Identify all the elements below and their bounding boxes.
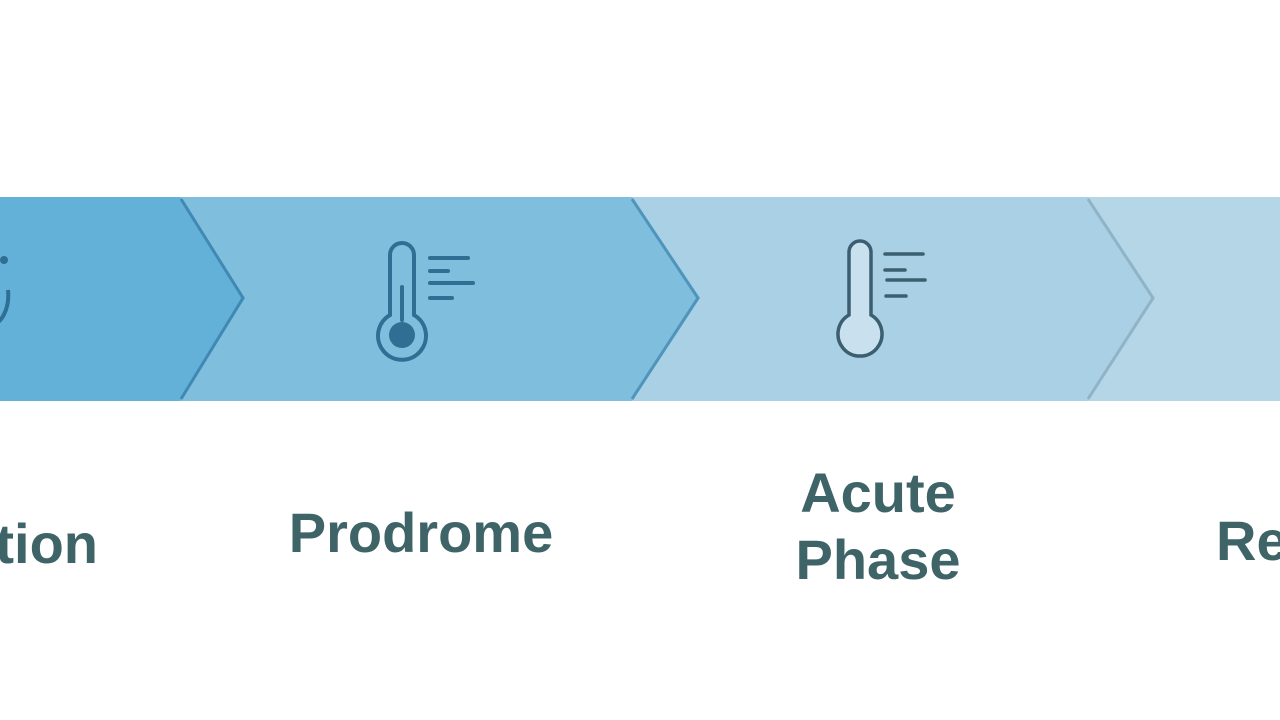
icon: partial circular arrow [0,256,8,325]
icon: thermometer high [378,243,473,360]
chevron edge 3 [1088,199,1153,399]
label: Acute Phase: Phase [796,528,960,591]
segment 2 [0,197,700,401]
chevron edge 1 [181,199,243,399]
segment 3 [0,197,1155,401]
label: Prodrome: Prodrome [289,501,553,564]
segment 4 [0,197,1280,401]
chevron edge 2 [632,199,698,399]
panel: stage band [0,197,1280,401]
label: Acute Phase: Acute [800,461,956,524]
icon: thermometer low [838,241,925,356]
segment 1 [0,197,245,401]
